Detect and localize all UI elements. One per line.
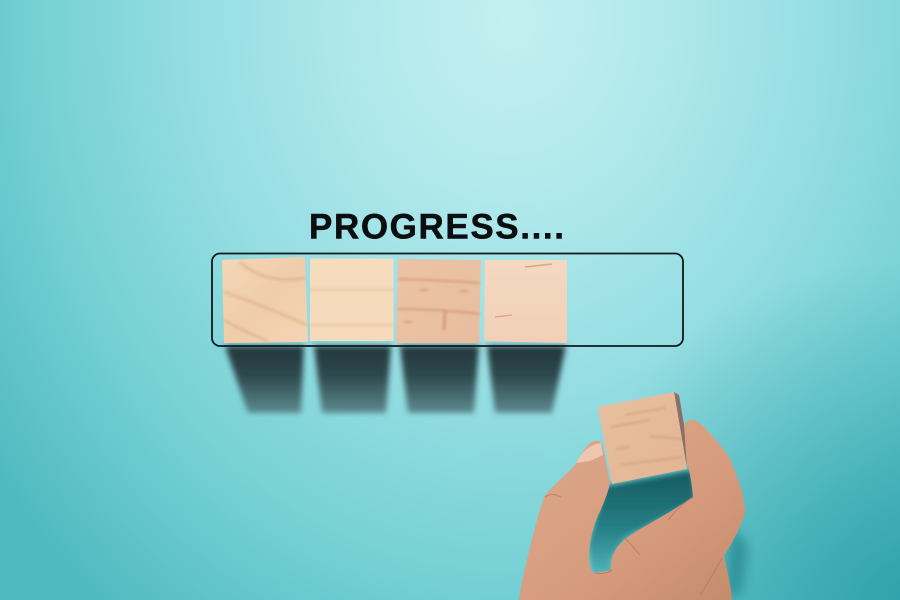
hand creases [545, 494, 722, 595]
wood block 4 [484, 260, 567, 343]
cube side [674, 392, 687, 468]
heading: PROGRESS.... [309, 208, 564, 246]
cube grain [610, 408, 682, 465]
block shadows [225, 346, 566, 413]
hand palm and thumb [519, 420, 745, 600]
thumbnail [576, 443, 603, 463]
wood block 3 [396, 259, 481, 343]
wood block 2 [310, 258, 394, 341]
hand shadow [588, 470, 748, 600]
progress bar frame [212, 254, 683, 346]
hand with wood cube [519, 392, 745, 600]
cube face [598, 392, 687, 484]
wood block 1 [222, 257, 308, 343]
